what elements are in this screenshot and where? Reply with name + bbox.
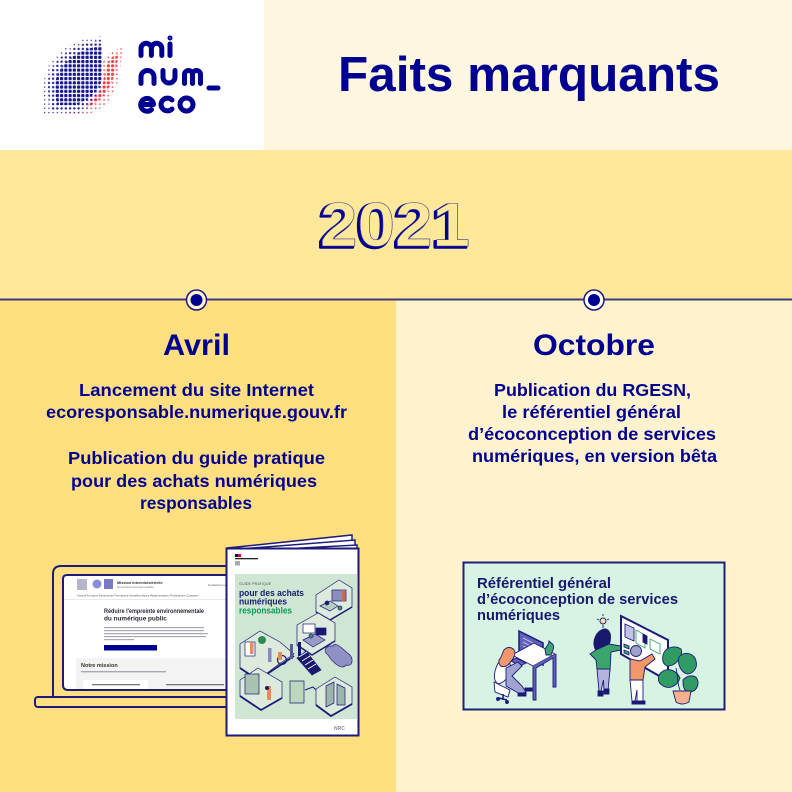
timeline marker: avril <box>186 290 206 310</box>
card title: numériques <box>477 608 560 624</box>
illustration: lightbulb <box>597 614 609 628</box>
title: Faits marquants <box>338 48 720 102</box>
laptop screen: Accueil À propos Ressources Formations Actualités Agora Réglementation Publications Contacter <box>77 594 198 598</box>
laptop screen: Notre mission <box>81 663 118 669</box>
card title <box>477 576 678 624</box>
guide booklet: NRC <box>334 726 345 732</box>
french government mark <box>235 554 258 566</box>
illustration: potted plant <box>658 647 698 704</box>
text block: site launch <box>46 380 347 422</box>
laptop screen <box>63 575 230 690</box>
text block: guide publication: pour des achats numériques <box>71 471 317 491</box>
guide title: responsables <box>239 606 292 616</box>
text block: rgesn publication: Publication du RGESN, <box>494 380 691 400</box>
guide booklet <box>226 535 358 736</box>
heading: octobre: Octobre <box>533 329 655 362</box>
timeline <box>0 290 792 310</box>
card title: d’écoconception de services <box>477 592 678 608</box>
guide booklet: GUIDE PRATIQUE <box>239 582 272 586</box>
year 2021: 2021 <box>320 191 470 260</box>
guide title <box>239 588 304 616</box>
year 2021: 2021 <box>318 192 468 262</box>
guide title: pour des achats <box>239 588 304 598</box>
card title: Référentiel général <box>477 576 611 592</box>
panel: avril <box>0 300 396 792</box>
heading: avril: Avril <box>163 329 230 362</box>
icon: dotted leaf logo <box>44 36 122 114</box>
laptop illustration <box>35 566 230 707</box>
text block: rgesn publication <box>468 380 717 466</box>
illustration: woman at board <box>590 629 621 696</box>
laptop screen: Numérique écoresponsable <box>117 585 154 589</box>
logo wordmark <box>141 37 218 111</box>
illustration: woman at desk <box>494 631 556 704</box>
text block: rgesn publication: numériques, en version bêta <box>472 446 717 466</box>
text block: guide publication <box>68 448 325 513</box>
panel: octobre <box>396 300 792 792</box>
illustration: man at board <box>630 646 655 704</box>
text block: rgesn publication: le référentiel général <box>502 402 681 422</box>
laptop screen: Contactez-nous <box>208 583 230 587</box>
text block: site launch: Lancement du site Internet <box>79 380 314 400</box>
text block: guide publication: Publication du guide pratique <box>68 448 325 468</box>
rgesn card <box>464 562 724 710</box>
text block: guide publication: responsables <box>140 493 252 513</box>
header background <box>264 0 792 150</box>
text block: site launch: ecoresponsable.numerique.gouv.fr <box>46 402 347 422</box>
logo panel <box>0 0 264 150</box>
timeline marker: octobre <box>584 290 604 310</box>
laptop screen: Réduire l'empreinte environnementale <box>104 608 204 615</box>
text block: rgesn publication: d’écoconception de services <box>468 424 716 444</box>
year band <box>0 150 792 300</box>
laptop screen: du numérique public <box>104 616 167 622</box>
laptop screen: Mission interministérielle <box>117 581 163 585</box>
guide cover panel <box>235 574 357 719</box>
isometric rooms illustration <box>240 580 352 716</box>
illustration: whiteboard <box>621 616 668 681</box>
guide title: numériques <box>239 596 287 606</box>
